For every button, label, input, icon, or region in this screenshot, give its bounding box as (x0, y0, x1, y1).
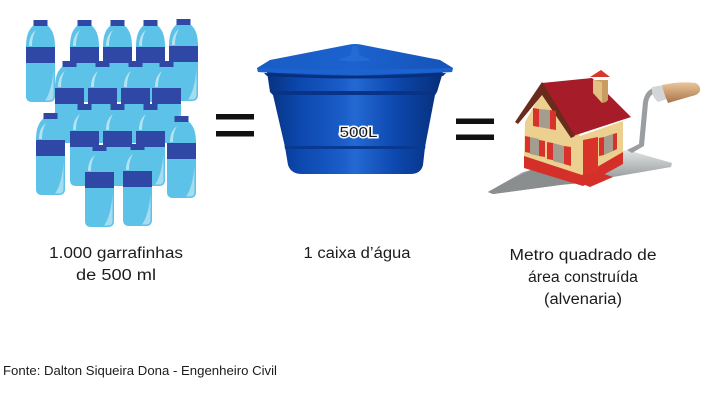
caption: water tank: 1 caixa d’água (304, 245, 411, 262)
house walls (524, 92, 623, 177)
trowel handle (627, 88, 656, 153)
icon: first equals sign (216, 114, 254, 136)
icon: group of water bottles (26, 19, 198, 227)
caption: bottles: 1.000 garrafinhas (49, 245, 183, 262)
trowel blade (488, 150, 672, 194)
tank capacity label: 500L (340, 124, 378, 141)
chimney (593, 80, 608, 103)
caption: bottles: de 500 ml (76, 267, 156, 284)
house roof (542, 78, 631, 136)
caption: bottles (49, 245, 183, 284)
caption: built area: Metro quadrado de (510, 247, 656, 264)
caption: built area: (alvenaria) (544, 291, 622, 308)
icon: blue water tank (257, 44, 453, 174)
house base (524, 152, 623, 186)
caption: built area: área construída (528, 269, 638, 286)
icon: second equals sign (456, 118, 494, 140)
icon: house on a trowel (488, 70, 700, 194)
caption: built area (510, 247, 656, 308)
source note: Fonte: Dalton Siqueira Dona - Engenheiro Civil (3, 364, 277, 378)
house door (583, 137, 598, 180)
house windows (525, 108, 617, 166)
